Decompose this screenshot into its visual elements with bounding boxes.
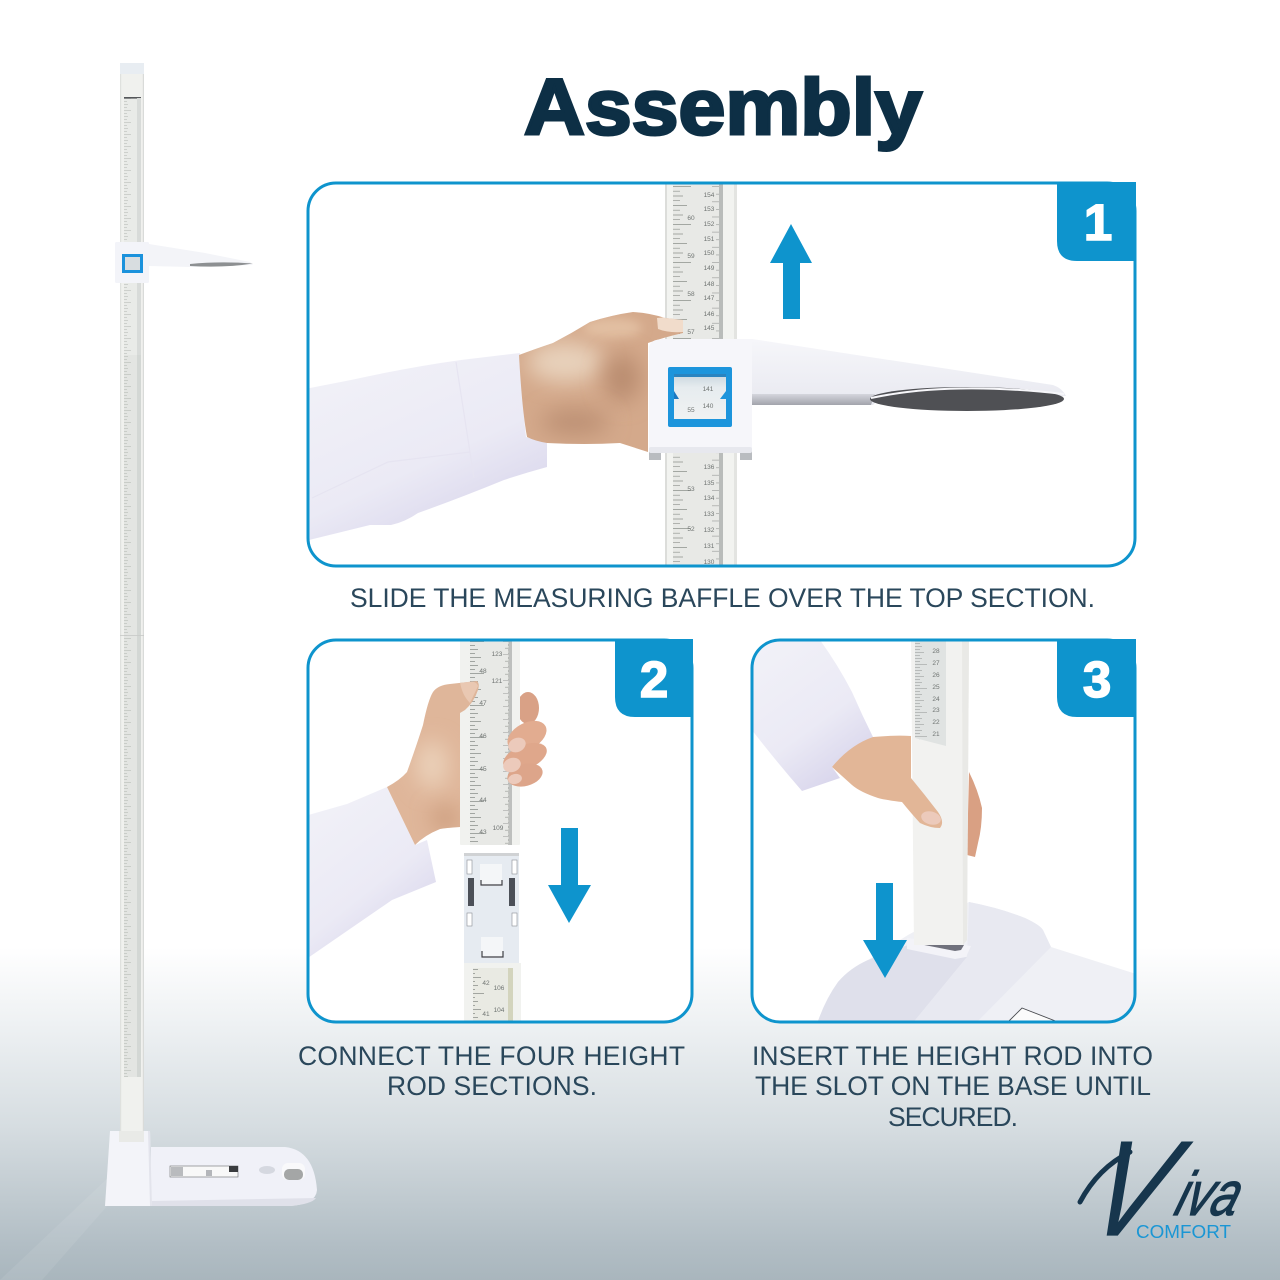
caption 1: SLIDE THE MEASURING BAFFLE OVER THE TOP SECTION. [350,583,1095,613]
badge 1 [1057,182,1136,261]
height rod: 154 [704,192,715,199]
badge 3 [1057,639,1136,717]
full height rod product photo [105,63,317,1206]
upper rod section: 48 [479,668,487,675]
rod: 27 [932,660,940,667]
height rod: 58 [687,291,695,298]
height rod: 150 [704,250,715,257]
badge 1: 1 [1084,194,1112,251]
connector [464,853,519,965]
baffle body: 140 [703,403,714,410]
panel 3 border [752,640,1135,1022]
height rod: 153 [704,206,715,213]
rod: 21 [932,731,940,738]
height rod: 132 [704,527,715,534]
lower rod section: 104 [494,1007,505,1014]
panel 1 photo [305,183,1066,567]
rod: 28 [932,648,940,655]
rod: 25 [932,684,940,691]
logo: iva [1168,1159,1253,1229]
caption 2: ROD SECTIONS. [387,1071,597,1101]
down arrow [863,883,907,978]
sleeve [305,353,547,541]
badge 2 [615,639,693,717]
height rod: 134 [704,495,715,502]
height rod: 152 [704,221,715,228]
title: Assembly [524,62,922,151]
height rod: 149 [704,265,715,272]
height rod: 135 [704,480,715,487]
panel 1 background [308,183,1135,566]
panel 3 [748,639,1136,1024]
height rod: 52 [687,526,695,533]
baffle body [649,339,752,460]
sleeve [748,640,873,791]
height rod: 60 [687,215,695,222]
upper rod section: 121 [492,678,503,685]
finger behind rod [520,692,539,723]
measuring baffle [115,242,253,283]
down arrow [548,828,591,923]
height rod: 151 [704,236,715,243]
height rod: 130 [704,559,715,566]
height rod: 136 [704,464,715,471]
sleeve [305,787,436,960]
upper rod section: 47 [479,700,487,707]
baffle arm [735,339,1066,411]
hand [832,736,942,828]
lower rod section: 41 [482,1011,490,1018]
upper rod section [460,640,520,845]
rod: 24 [932,696,940,703]
lower rod section [464,963,521,1023]
rod: 22 [932,719,940,726]
rod: 23 [932,707,940,714]
height rod: 53 [687,486,695,493]
panel 2 photo [305,640,591,1023]
upper rod section: 44 [479,797,487,804]
fingers behind rod [967,772,982,857]
badge 2: 2 [640,651,668,708]
badge 3: 3 [1083,651,1111,708]
height rod: 148 [704,281,715,288]
panel 2 border [308,640,692,1022]
up arrow [770,224,812,319]
panel 3 photo [748,640,1136,1024]
caption 3: THE SLOT ON THE BASE UNTIL [755,1071,1151,1101]
upper rod section: 46 [479,733,487,740]
base [817,902,1136,1024]
upper rod section: 43 [479,829,487,836]
sleeve folds [456,362,463,404]
panel 1 border [308,183,1135,566]
baffle body: 55 [687,407,695,414]
caption 3 [752,1041,1153,1132]
height rod [665,183,737,567]
rod shaft [120,63,144,1141]
height rod: 131 [704,543,715,550]
caption 2: CONNECT THE FOUR HEIGHT [298,1041,685,1071]
caption 2 [298,1041,685,1101]
panel 2 [305,639,693,1023]
rod [911,640,969,945]
panel 1 [305,182,1136,567]
lower rod section: 106 [494,985,505,992]
lower rod section: 42 [482,980,490,987]
caption 3: SECURED. [888,1102,1018,1132]
base [105,1131,317,1206]
upper rod section: 123 [492,651,503,658]
floor reflection [0,1178,108,1280]
height rod: 145 [704,325,715,332]
upper rod section: 109 [493,825,504,832]
logo: COMFORT [1136,1222,1231,1242]
hand [519,312,683,452]
panel 3 background [752,640,1135,1022]
upper rod section: 45 [479,766,487,773]
height rod: 133 [704,511,715,518]
rod: 26 [932,672,940,679]
baffle body: 141 [703,386,714,393]
height rod: 59 [687,253,695,260]
panel 2 background [308,640,692,1022]
height rod: 146 [704,311,715,318]
height rod: 57 [687,329,695,336]
hand [387,681,547,845]
caption 3: INSERT THE HEIGHT ROD INTO [752,1041,1153,1071]
logo: V [1072,1114,1202,1264]
height rod: 147 [704,295,715,302]
